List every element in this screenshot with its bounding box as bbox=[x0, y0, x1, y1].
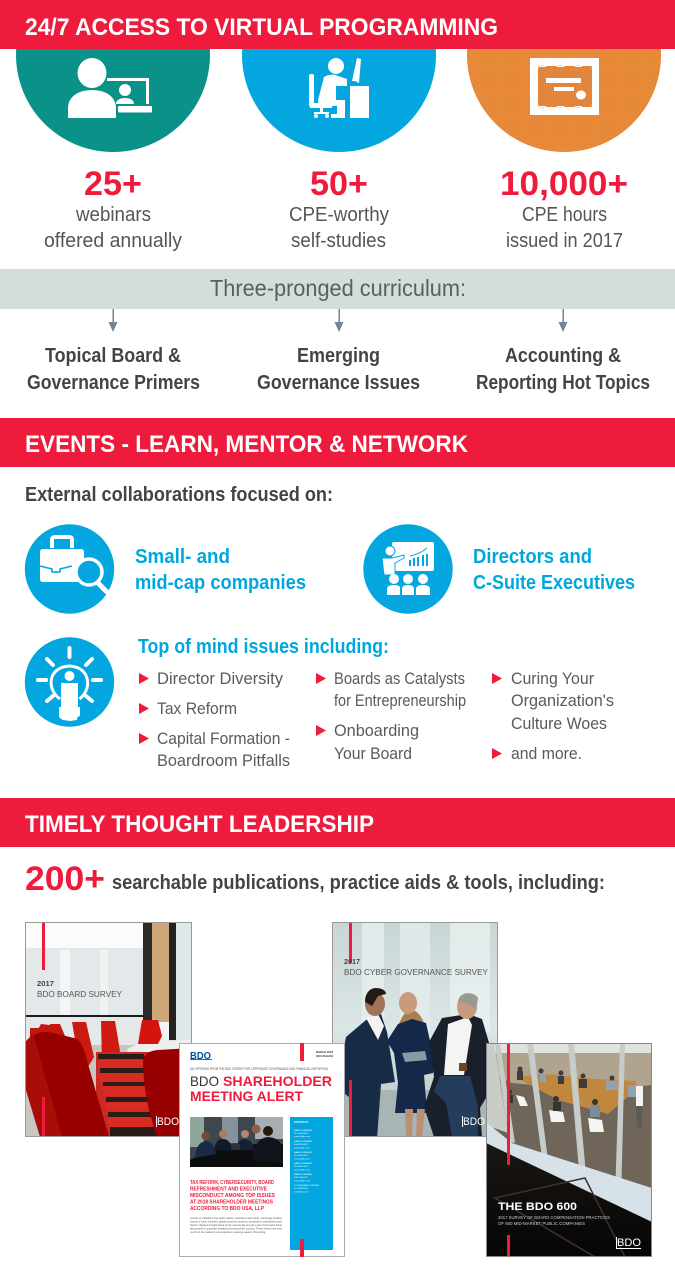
section band: virtual programming: 24/7 ACCESS TO VIRTUAL PROGRAMMING bbox=[25, 14, 498, 41]
headline text: ACCORDING TO BDO USA, LLP bbox=[190, 1206, 264, 1212]
cover: BDO 600 bbox=[486, 1043, 652, 1257]
icon: person at desk bbox=[309, 58, 369, 118]
stat: publications: 200+ bbox=[25, 860, 105, 898]
contact column: GOVERNANCE CENTER bbox=[294, 1184, 320, 1187]
intro text: External collaborations focused on: bbox=[25, 484, 333, 506]
body copy bbox=[190, 1216, 282, 1234]
list: column 3: and more. bbox=[511, 744, 582, 763]
document: shareholder meeting alert bbox=[180, 1043, 344, 1257]
stat: webinars: webinars bbox=[75, 204, 151, 226]
list: column 2 bbox=[316, 669, 466, 763]
icon: lightbulb with person bbox=[25, 637, 114, 727]
headline text: REFRESHMENT AND EXECUTIVE bbox=[190, 1186, 267, 1192]
stat: CPE hours: CPE hours bbox=[522, 204, 607, 226]
room interior bbox=[493, 1078, 651, 1188]
document: shareholder meeting alert: BDO bbox=[190, 1073, 219, 1089]
white sill band bbox=[486, 1122, 652, 1222]
curriculum: topical primers bbox=[27, 345, 200, 394]
list: column 1 bbox=[139, 669, 290, 770]
document: shareholder meeting alert: MEETING ALERT bbox=[190, 1088, 303, 1104]
contact column: name@bdo.com bbox=[294, 1180, 310, 1182]
section band: virtual programming bbox=[0, 0, 675, 49]
contact column: NAME SURNAME bbox=[294, 1129, 312, 1132]
document: shareholder meeting alert: SHAREHOLDER bbox=[223, 1073, 332, 1089]
list: column 3 bbox=[492, 669, 614, 763]
cover: board survey: BDO bbox=[157, 1116, 179, 1128]
icon: briefcase and magnifier bbox=[25, 524, 114, 614]
section band: thought leadership: TIMELY THOUGHT LEADERSHIP bbox=[25, 811, 374, 838]
contact column: NAME SURNAME bbox=[294, 1151, 312, 1154]
cover: board survey: 2017 bbox=[37, 981, 54, 988]
cover: cyber governance survey bbox=[332, 922, 498, 1139]
window mullions bbox=[495, 1044, 625, 1178]
cover: BDO 600: OF 600 MID-MARKET PUBLIC COMPANIES bbox=[498, 1221, 585, 1226]
contact column: 214-969-7007 bbox=[294, 1166, 308, 1168]
man right bbox=[424, 1014, 492, 1137]
document: shareholder meeting alert: AN OFFERING FROM THE BDO CENTER FOR CORPORATE GOVERNANCE AND FINANCIAL REPORTING bbox=[190, 1067, 328, 1071]
contact column: 212-885-8000 bbox=[294, 1133, 308, 1135]
section band: events: EVENTS - LEARN, MENTOR & NETWORK bbox=[25, 431, 469, 458]
cover: cyber governance survey: 2017 bbox=[344, 959, 360, 966]
headline text: MISCONDUCT AMONG TOP ISSUES bbox=[190, 1193, 275, 1199]
document: shareholder meeting alert: MARCH 2018 bbox=[316, 1050, 333, 1054]
contact column: name@bdo.com bbox=[294, 1148, 310, 1150]
label: directors and executives: Directors and bbox=[473, 546, 592, 568]
arrow: emerging bbox=[334, 309, 344, 332]
contact column bbox=[290, 1117, 333, 1250]
contact column: name@bdo.com bbox=[294, 1136, 310, 1138]
list: column 2: Your Board bbox=[334, 744, 412, 763]
man left bbox=[344, 1014, 395, 1136]
body copy: A wave of volatility in the stock market, executive misconduct, seemingly endless bbox=[190, 1216, 282, 1220]
cover: board survey bbox=[25, 922, 192, 1137]
stat: publications bbox=[25, 860, 605, 898]
stat: CPE hours: 10,000+ bbox=[500, 165, 628, 203]
document: shareholder meeting alert: ISSUE RELEASE bbox=[316, 1054, 333, 1058]
photo: meeting bbox=[190, 1117, 283, 1167]
list: column 2: Onboarding bbox=[334, 721, 419, 740]
list: column 1: Director Diversity bbox=[157, 669, 283, 688]
list: column 3: Culture Woes bbox=[511, 714, 607, 733]
curriculum: emerging issues: Emerging bbox=[297, 345, 380, 367]
headline text: AT 2018 SHAREHOLDER MEETINGS bbox=[190, 1200, 273, 1206]
stat: self-studies bbox=[289, 165, 389, 252]
cover: cyber governance survey: BDO bbox=[463, 1116, 485, 1128]
contact column: CONTACT bbox=[294, 1120, 309, 1124]
cover: BDO 600: BDO bbox=[617, 1237, 641, 1249]
stat: self-studies: self-studies bbox=[291, 230, 386, 252]
body copy: reports of cyber breaches, global economic concerns, demands for transparency and bbox=[190, 1220, 282, 1224]
contact column: NAME SURNAME bbox=[294, 1162, 312, 1165]
label: directors and executives bbox=[473, 546, 635, 594]
section band: thought leadership bbox=[0, 798, 675, 847]
icon: presenter on screen bbox=[68, 58, 152, 118]
cover: BDO 600: 2017 SURVEY OF BOARD COMPENSATION PRACTICES bbox=[498, 1215, 610, 1220]
curriculum band: Three-pronged curriculum: bbox=[210, 275, 466, 301]
list: column 3: Curing Your bbox=[511, 669, 594, 688]
stat: self-studies: CPE-worthy bbox=[289, 204, 389, 226]
curriculum: hot topics bbox=[476, 345, 650, 394]
contact column: name@bdo.com bbox=[294, 1158, 310, 1160]
stat: webinars: 25+ bbox=[84, 165, 142, 203]
stat: publications: searchable publications, practice aids & tools, including: bbox=[112, 872, 605, 894]
stat: CPE hours: issued in 2017 bbox=[506, 230, 623, 252]
label: small and mid-cap: Small- and bbox=[135, 546, 230, 568]
stat: CPE hours bbox=[500, 165, 628, 252]
list: column 1: Boardroom Pitfalls bbox=[157, 751, 290, 770]
left panel bbox=[487, 1044, 507, 1133]
curriculum: topical primers: Governance Primers bbox=[27, 372, 200, 394]
headline text: TAX REFORM, CYBERSECURITY, BOARD bbox=[190, 1180, 274, 1186]
woman bbox=[387, 1019, 435, 1113]
stat: self-studies: 50+ bbox=[310, 165, 368, 203]
list: column 2: Boards as Catalysts bbox=[334, 669, 465, 688]
label: small and mid-cap: mid-cap companies bbox=[135, 572, 306, 594]
list: column 3: Organization's bbox=[511, 691, 614, 710]
icon: presenter with audience bbox=[363, 524, 453, 614]
cover: cyber governance survey: BDO CYBER GOVERNANCE SURVEY bbox=[344, 967, 488, 977]
heading: top of mind: Top of mind issues including: bbox=[138, 636, 389, 658]
list: column 1: Capital Formation - bbox=[157, 729, 290, 748]
cover: BDO 600: THE BDO 600 bbox=[498, 1201, 577, 1213]
stat: webinars: offered annually bbox=[44, 230, 182, 252]
headline text bbox=[190, 1180, 275, 1212]
icon: certificate bbox=[530, 58, 599, 115]
circle: self-studies bbox=[242, 0, 436, 152]
circle: CPE hours bbox=[467, 0, 661, 152]
contact column: 214-665-0673 bbox=[294, 1155, 308, 1157]
contact column: info@bdo.com bbox=[294, 1192, 308, 1194]
arrow: topical bbox=[108, 309, 118, 332]
section band: events bbox=[0, 418, 675, 467]
contact column: NAME SURNAME bbox=[294, 1173, 312, 1176]
curriculum: topical primers: Topical Board & bbox=[45, 345, 181, 367]
document: shareholder meeting alert: BDO bbox=[190, 1051, 211, 1062]
contact column: 212-885-8000 bbox=[294, 1188, 308, 1190]
list: column 2: for Entrepreneurship bbox=[334, 691, 466, 710]
stat: webinars bbox=[44, 165, 182, 252]
label: small and mid-cap bbox=[135, 546, 306, 594]
curriculum band bbox=[0, 269, 675, 309]
cover: board survey: BDO BOARD SURVEY bbox=[37, 989, 122, 999]
circle: webinars bbox=[16, 0, 210, 152]
curriculum: emerging issues: Governance Issues bbox=[257, 372, 420, 394]
label: directors and executives: C-Suite Executives bbox=[473, 572, 635, 594]
contact column: 408-278-0220 bbox=[294, 1177, 308, 1179]
arrow: accounting bbox=[558, 309, 568, 332]
list: column 1: Tax Reform bbox=[157, 699, 237, 718]
contact column: NAME SURNAME bbox=[294, 1140, 312, 1143]
body copy: historic changes brought about by the new tax law are just a few of the topics being bbox=[190, 1223, 282, 1227]
contact column: 404-688-6841 bbox=[294, 1144, 308, 1146]
curriculum: hot topics: Reporting Hot Topics bbox=[476, 372, 650, 394]
curriculum: hot topics: Accounting & bbox=[505, 345, 621, 367]
body copy: much on the radar for an outspoken meeting season this spring. bbox=[190, 1230, 266, 1234]
body copy: discussed in corporate boardrooms around the country. These issues are very bbox=[190, 1226, 282, 1230]
curriculum: emerging issues bbox=[257, 345, 420, 394]
contact column: name@bdo.com bbox=[294, 1170, 310, 1172]
